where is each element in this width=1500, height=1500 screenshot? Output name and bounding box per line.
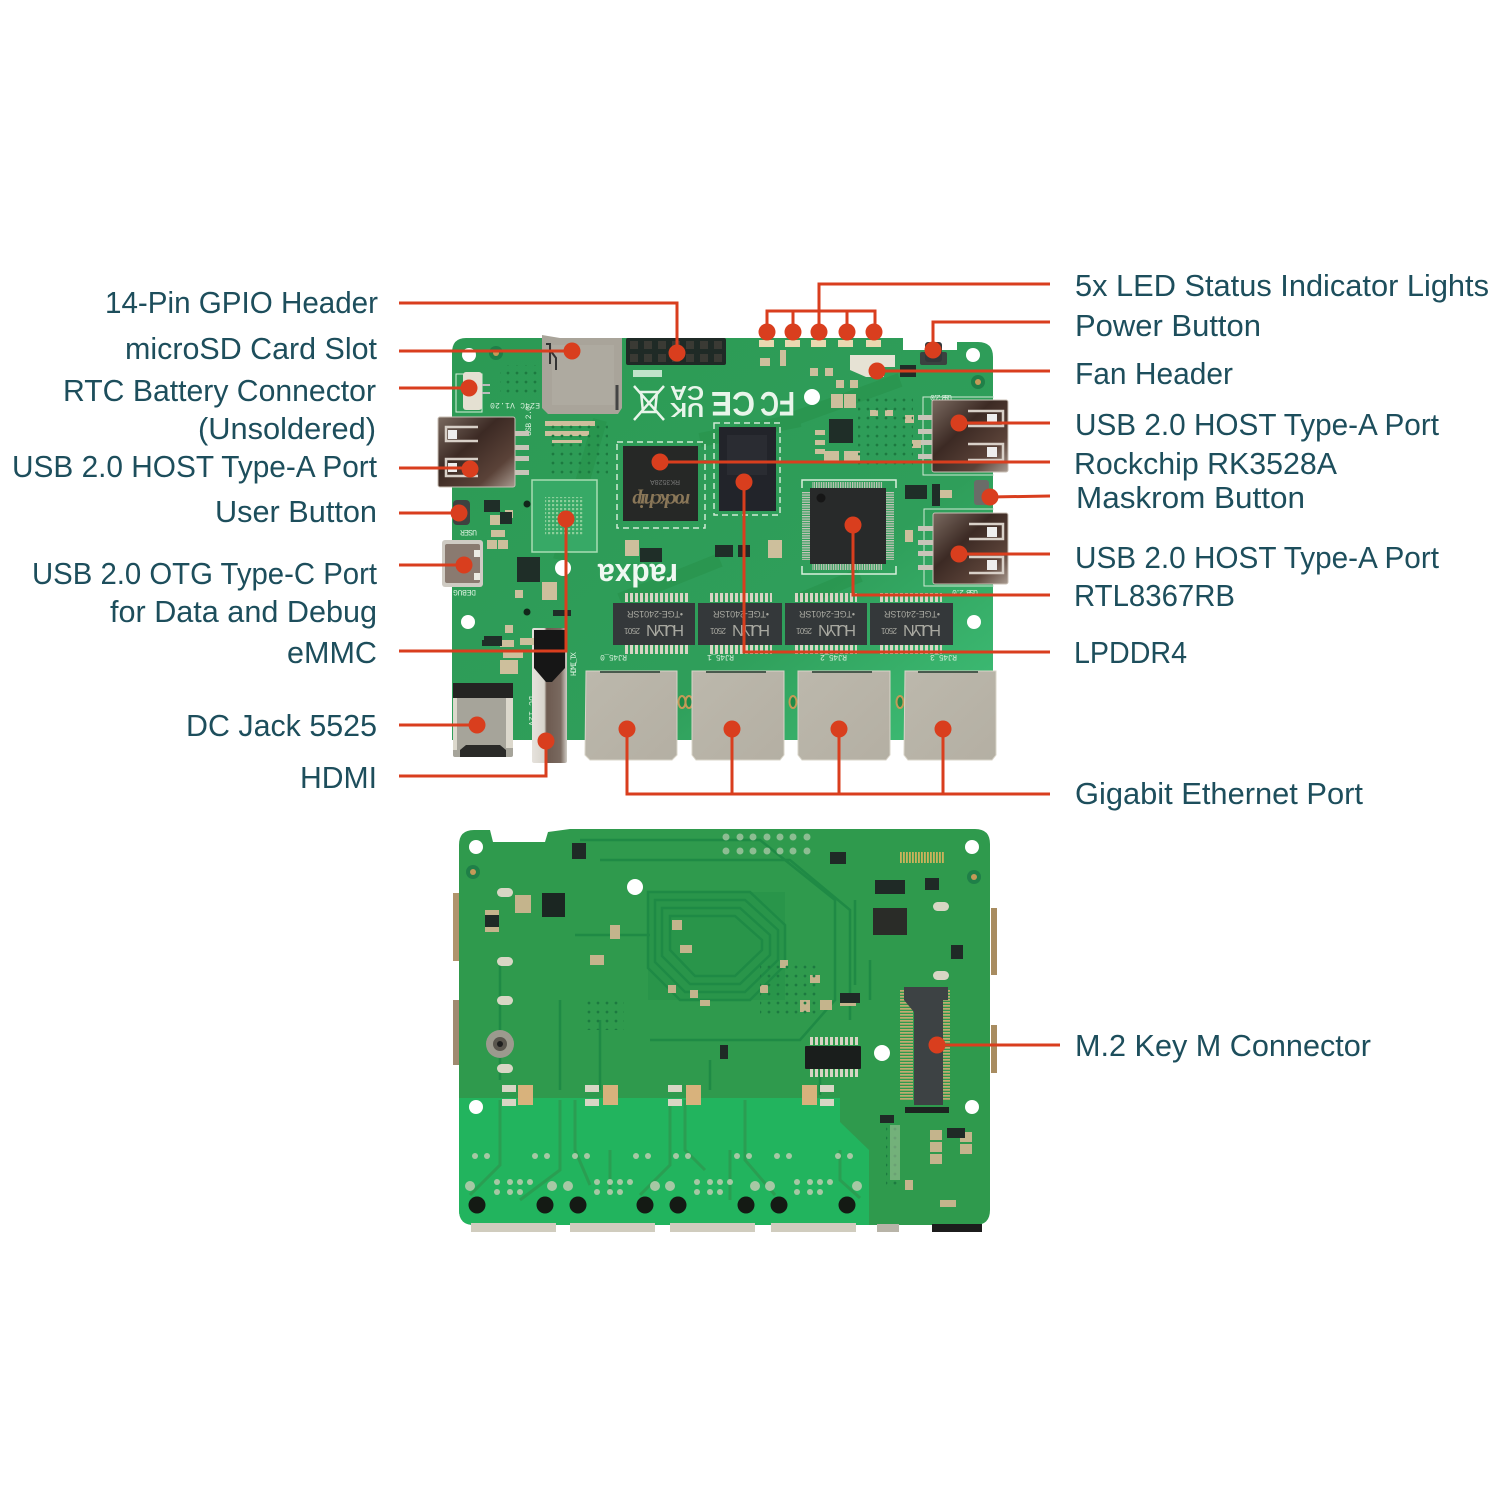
label: unsoldered: (Unsoldered) bbox=[198, 411, 376, 446]
board silkscreen: DEBUG bbox=[453, 587, 476, 596]
board silkscreen: USB 2.0 bbox=[930, 392, 952, 401]
board silkscreen: RJ45_0 bbox=[600, 652, 627, 661]
label: eMMC: eMMC bbox=[287, 635, 377, 670]
left USB leader bbox=[399, 460, 478, 478]
board silkscreen: USB 2.0 bbox=[525, 406, 534, 436]
network transformers: 2501 bbox=[623, 626, 640, 635]
radxa logo: radxa bbox=[598, 557, 678, 593]
right USB lower leader bbox=[950, 546, 1050, 562]
mounting holes bbox=[461, 348, 981, 629]
black plated holes bbox=[468, 1196, 856, 1214]
network transformers: •TGE-2401SR bbox=[798, 609, 855, 619]
RTC battery connector bbox=[456, 372, 490, 412]
Ethernet gold mounting tabs bbox=[678, 696, 904, 708]
DC jack leader bbox=[399, 716, 486, 734]
network transformers bbox=[613, 593, 953, 654]
SOIC chip bbox=[805, 1037, 861, 1077]
solder pad clusters bbox=[465, 1153, 862, 1195]
14-pin GPIO header bbox=[626, 338, 726, 365]
network transformers: •TGE-2401SR bbox=[626, 609, 683, 619]
plated vias bbox=[466, 865, 981, 884]
label: LEDs: 5x LED Status Indicator Lights bbox=[1075, 268, 1489, 303]
board silkscreen: RJ45_2 bbox=[820, 652, 847, 661]
board silkscreen: USB 2.0 bbox=[952, 587, 978, 596]
PCB top bbox=[452, 338, 993, 740]
board silkscreen: RJ45_1 bbox=[707, 652, 734, 661]
connector edges bbox=[453, 893, 997, 1232]
label: M.2: M.2 Key M Connector bbox=[1075, 1028, 1371, 1063]
user button bbox=[453, 500, 470, 525]
fan header leader bbox=[868, 362, 1050, 380]
network transformers: HULYN bbox=[732, 621, 770, 638]
Rockchip RK3528A SoC bbox=[617, 442, 705, 528]
network transformers: •TGE-2401SR bbox=[884, 609, 940, 619]
M.2 leader bbox=[928, 1036, 1060, 1054]
certification marks: CA bbox=[670, 381, 704, 403]
board: top view bbox=[432, 335, 1008, 763]
board silkscreen: USER bbox=[460, 527, 477, 536]
network transformers: 2501 bbox=[880, 626, 897, 635]
microSD leader bbox=[399, 342, 580, 360]
standoff bbox=[486, 1030, 514, 1058]
RTL8367RB leader bbox=[844, 516, 1050, 595]
capacitors on ethernet bbox=[518, 1085, 817, 1105]
certification marks bbox=[634, 381, 795, 422]
Rockchip leader bbox=[652, 454, 1050, 470]
plated vias bbox=[489, 346, 985, 616]
small components bbox=[482, 350, 952, 674]
network transformers: HULYN bbox=[903, 621, 941, 638]
labels: left column bbox=[12, 285, 378, 795]
white mounting holes bbox=[469, 840, 979, 1114]
label: RTL: RTL8367RB bbox=[1074, 578, 1235, 613]
LED indicators bbox=[759, 340, 881, 347]
network transformers: 2501 bbox=[795, 626, 812, 635]
power button leader bbox=[924, 322, 1050, 358]
Rockchip RK3528A SoC: rockchip bbox=[632, 489, 690, 511]
isolation area traces bbox=[470, 1100, 860, 1200]
fan header bbox=[850, 355, 895, 377]
label: LPDDR4: LPDDR4 bbox=[1074, 635, 1187, 670]
QFN chip bbox=[542, 893, 565, 917]
board silkscreen bbox=[453, 392, 978, 726]
user button leader bbox=[399, 504, 468, 522]
HDMI leader bbox=[399, 732, 554, 776]
RTL8367RB switch bbox=[802, 480, 896, 574]
label: HDMI: HDMI bbox=[300, 760, 377, 795]
Ethernet leaders bbox=[618, 720, 1050, 794]
M.2 Key M connector bbox=[900, 987, 950, 1113]
board silkscreen: RJ45_3 bbox=[930, 652, 957, 661]
LED leaders bbox=[758, 284, 1050, 340]
LPDDR4 leader bbox=[736, 474, 1050, 652]
label: DC jack: DC Jack 5525 bbox=[186, 708, 377, 743]
leader lines bbox=[399, 284, 1060, 1054]
label: user button: User Button bbox=[215, 494, 377, 529]
USB 2.0 port left bbox=[432, 417, 530, 487]
board silkscreen: HDMI_TX bbox=[570, 652, 579, 676]
routing traces bbox=[500, 840, 870, 1095]
top through-hole row bbox=[722, 834, 810, 854]
DC jack bbox=[453, 683, 513, 757]
network transformers: HULYN bbox=[818, 621, 856, 638]
flash chip bbox=[873, 908, 907, 935]
GPIO leader bbox=[399, 303, 686, 362]
certification marks: CE bbox=[711, 384, 755, 422]
board silkscreen: DC 12V bbox=[526, 696, 535, 726]
eMMC pad bbox=[532, 480, 597, 552]
LPDDR4 memory bbox=[714, 423, 780, 515]
RTC leader bbox=[399, 380, 478, 396]
Rockchip RK3528A SoC: RK3528A bbox=[650, 478, 680, 485]
certification marks: UK bbox=[669, 398, 704, 420]
label: maskrom: Maskrom Button bbox=[1076, 480, 1305, 515]
label: power: Power Button bbox=[1075, 308, 1261, 343]
small bottom components bbox=[485, 843, 972, 1207]
label: fan: Fan Header bbox=[1075, 356, 1233, 391]
eMMC leader bbox=[399, 510, 574, 651]
label: Ethernet: Gigabit Ethernet Port bbox=[1075, 776, 1363, 811]
label: USB upper: USB 2.0 HOST Type-A Port bbox=[1075, 407, 1439, 442]
board silkscreen: E24C V1.20 bbox=[490, 400, 540, 409]
network transformers: 2501 bbox=[709, 626, 726, 635]
label: Rockchip: Rockchip RK3528A bbox=[1074, 446, 1337, 481]
network transformers: •TGE-2401SR bbox=[712, 609, 769, 619]
label: left USB: USB 2.0 HOST Type-A Port bbox=[12, 449, 377, 484]
white pads bbox=[497, 888, 949, 1106]
USB 2.0 port right lower bbox=[918, 509, 1008, 586]
right USB upper leader bbox=[950, 414, 1050, 432]
power button bbox=[920, 342, 947, 365]
label: RTC: RTC Battery Connector bbox=[63, 373, 376, 408]
label: Type-C: USB 2.0 OTG Type-C Port bbox=[32, 556, 377, 591]
labels: right column bbox=[1074, 268, 1489, 1063]
USB 2.0 port right upper bbox=[918, 397, 1008, 475]
certification marks: FC bbox=[760, 384, 795, 422]
HDMI port bbox=[532, 628, 567, 763]
maskrom button bbox=[974, 480, 989, 505]
label: data and debug: for Data and Debug bbox=[110, 594, 377, 629]
board: bottom view bbox=[453, 829, 997, 1232]
USB Type-C port bbox=[442, 540, 483, 587]
label: GPIO: 14-Pin GPIO Header bbox=[105, 285, 378, 320]
Type-C leader bbox=[399, 556, 472, 574]
network transformers: HULYN bbox=[646, 621, 684, 638]
microSD card slot bbox=[542, 335, 622, 414]
gold fingers bbox=[900, 852, 945, 863]
Gigabit Ethernet jacks bbox=[585, 671, 996, 760]
label: USB lower: USB 2.0 HOST Type-A Port bbox=[1075, 540, 1439, 575]
white label patch bbox=[633, 370, 662, 377]
label: microSD: microSD Card Slot bbox=[125, 331, 377, 366]
bright RJ45 isolation area bbox=[459, 1098, 869, 1225]
PCB bottom bbox=[459, 829, 990, 1225]
maskrom leader bbox=[982, 488, 1050, 506]
